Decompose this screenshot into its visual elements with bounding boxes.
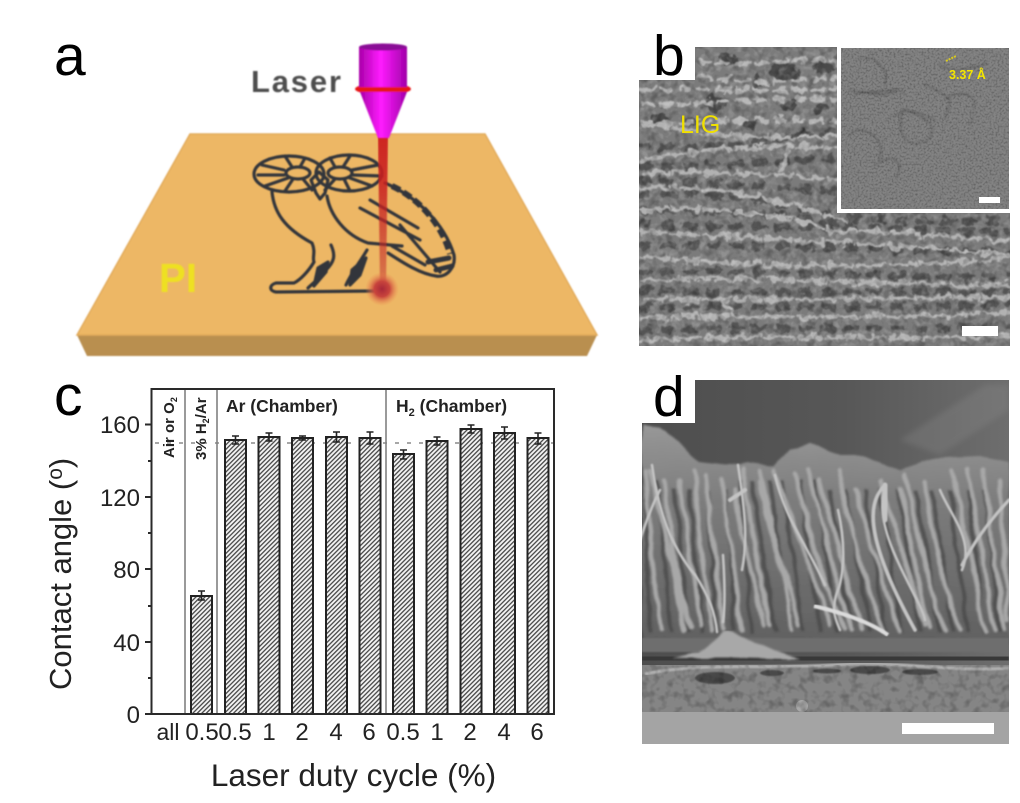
panel letter c: c [54,364,82,428]
x axis numbers: 1 [262,719,276,746]
y axis title: ) [43,458,78,468]
error bars [198,425,542,600]
group label: hydrogen chamber: (Chamber) [415,396,507,416]
panel letter d: d [653,365,685,429]
inset scale bar [979,197,1000,203]
y axis numbers: 120 [100,485,140,512]
bars [191,429,548,714]
group label: hydrogen chamber: 2 [409,407,415,419]
laser label: Laser [251,64,341,99]
scale bar [962,326,998,336]
owl logo [254,155,454,292]
group label: air or oxygen: Air or O [161,402,178,458]
x axis numbers: 0.5 [386,719,420,746]
group dividers [185,389,386,714]
panel a letter: a [54,24,86,88]
y axis numbers: 0 [127,702,140,729]
x axis numbers [156,719,544,746]
laser nozzle [355,44,411,138]
scale bar [902,723,994,734]
panel c: contact angle bar chart [43,364,554,793]
y axis numbers [100,412,140,729]
y axis numbers: 160 [100,412,140,439]
LIG label: LIG [680,111,720,139]
x axis numbers: all [156,719,180,745]
y axis numbers: 80 [113,557,140,584]
x axis numbers: 2 [295,719,309,746]
group label: hydrogen argon mix: /Ar [193,397,210,418]
group label: argon chamber: Ar (Chamber) [226,396,338,416]
x axis numbers: 6 [530,719,544,746]
SEM image [640,380,1009,744]
inset spacing label: 3.37 Å [949,67,986,82]
x axis numbers: 6 [362,719,376,746]
SEM image [639,47,1010,346]
panel d letter backing [630,370,695,423]
y axis title: o [44,468,67,480]
x axis numbers: 2 [463,719,477,746]
PI label: PI [159,255,197,301]
TEM inset [837,47,1010,213]
plot frame and axis ticks [145,389,554,714]
reference line at 150 degrees [155,442,553,444]
panel letter b: b [653,24,685,88]
x axis numbers: 1 [430,719,444,746]
x axis numbers: 4 [497,719,511,746]
polyimide sheet [77,134,597,356]
group label: air or oxygen: 2 [169,397,179,402]
panel d: cross-section SEM of fibers [630,365,1009,744]
group label: hydrogen argon mix: 2 [201,418,211,423]
panel b: SEM micrograph [630,20,1010,346]
x axis numbers: 0.5 [218,719,252,746]
y axis title: Contact angle ( [43,480,78,690]
group label: hydrogen argon mix: 3% H [193,423,210,460]
panel a: laser scribing schematic [77,44,597,356]
y axis numbers: 40 [113,630,140,657]
x axis numbers: 0.5 [185,719,219,746]
laser beam and spot [365,136,399,306]
group label: hydrogen chamber: H [396,396,409,416]
x axis numbers: 4 [329,719,343,746]
x axis title: Laser duty cycle (%) [211,757,496,793]
panel b letter backing [630,20,695,80]
